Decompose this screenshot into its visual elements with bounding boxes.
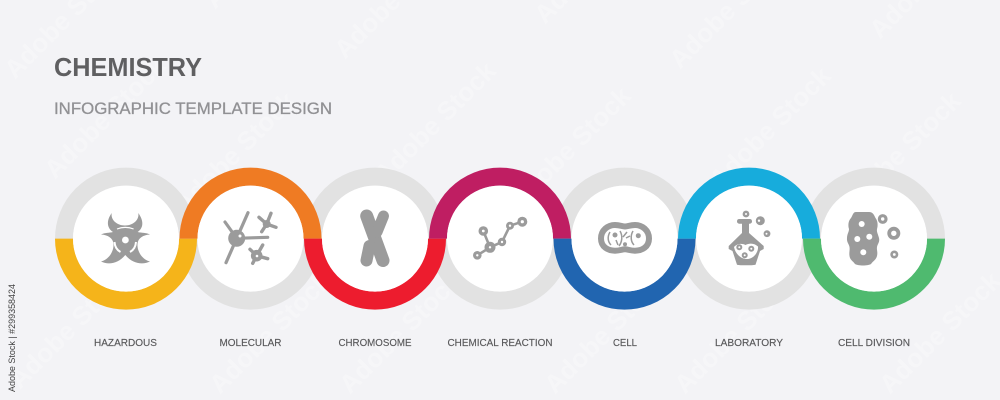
icon: chromosome (366, 216, 384, 260)
text: Adobe Stock (3, 260, 137, 394)
ring: chemical reaction magenta arc (438, 177, 562, 239)
text: Adobe Stock (703, 60, 837, 194)
ring: cell division green arc (812, 239, 936, 301)
ring track: grey background arcs (64, 177, 936, 301)
ring: cell blue arc (562, 239, 686, 301)
title: CHEMISTRY (54, 52, 202, 82)
icon: cell (601, 225, 649, 251)
label: chromosome: CHROMOSOME (338, 337, 412, 349)
ring: hazardous yellow arc (64, 239, 188, 301)
ring: chromosome red arc (313, 239, 437, 301)
label: chemical reaction: CHEMICAL REACTION (448, 337, 552, 349)
ring: laboratory cyan arc (687, 177, 811, 239)
vertical stock credit: Adobe Stock | #299358424 (7, 284, 18, 392)
icon: chemical reaction (473, 217, 527, 260)
label: laboratory: LABORATORY (715, 337, 783, 349)
label: cell division: CELL DIVISION (838, 337, 910, 349)
white circle discs (73, 186, 927, 292)
icon: cell division (847, 212, 898, 266)
text: Adobe Stock (503, 80, 637, 214)
icon: molecular (225, 213, 276, 263)
label: molecular: MOLECULAR (220, 337, 282, 349)
text: Adobe Stock (833, 85, 967, 219)
subtitle: INFOGRAPHIC TEMPLATE DESIGN (54, 100, 332, 118)
text: Adobe Stock (168, 85, 302, 219)
ring: molecular orange arc (188, 177, 312, 239)
label: hazardous: HAZARDOUS (94, 337, 157, 349)
text: Adobe Stock (368, 55, 502, 189)
icon: biohazard (101, 213, 150, 263)
label: cell: CELL (613, 337, 637, 349)
text: Adobe Stock (203, 265, 337, 399)
text: Adobe Stock (333, 265, 467, 399)
icon: laboratory flask (729, 211, 770, 265)
labels (94, 337, 910, 349)
text: Adobe Stock (538, 265, 672, 399)
text: Adobe Stock (668, 265, 802, 399)
text: Adobe Stock (38, 50, 172, 184)
